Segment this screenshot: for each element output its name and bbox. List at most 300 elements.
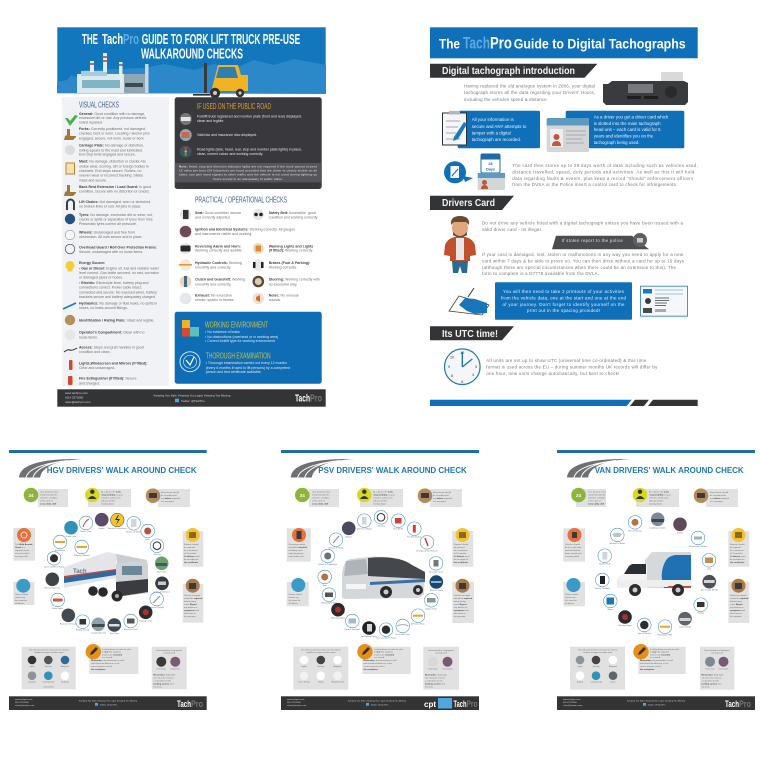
info box: left upper: Check is a xyxy=(15,547,26,549)
check bubbles ring: Coupling & Curtains xyxy=(649,526,666,529)
info box: right lower: Vehicle excepted xyxy=(730,594,747,597)
info box: 24 hour: 24 xyxy=(576,493,581,498)
heading xyxy=(82,32,300,62)
panel: drivers duties xyxy=(86,644,138,674)
panel: daily checks: The walk around check must cover the external xyxy=(301,648,341,652)
working environment bullets: • Correct forklift type for working environment xyxy=(205,339,275,343)
info box: right upper: All defects must xyxy=(184,555,200,558)
panel: equipment: correctly at all xyxy=(163,652,176,655)
icon: driver character xyxy=(444,216,476,273)
panel: drivers duties: Remember: documentation is vital xyxy=(364,659,397,662)
info box: right lower: should be repaired xyxy=(730,598,749,600)
icon: clock: 8 xyxy=(451,374,453,378)
info box: right lower: any defects or xyxy=(184,606,198,609)
practical check text: Noise: No unusual xyxy=(269,294,299,298)
icon: yellow fork lift truck xyxy=(193,63,248,98)
info box: 24 hour: at the start of xyxy=(40,500,53,502)
checks list text: General: Good condition with no damage, xyxy=(79,112,145,116)
icon: road logo xyxy=(567,459,631,478)
info box: report defects: to a manager. xyxy=(433,500,446,503)
info box: 24 hour: at the start of xyxy=(588,500,601,502)
panel: drivers duties: and should be filled out, in the xyxy=(640,662,669,665)
panel: drivers duties: Remember: documentation is vital xyxy=(91,659,124,662)
practical check text: Working correctly. xyxy=(269,265,297,269)
callout: driver card: head unit – each card is valid for 5 xyxy=(594,127,661,132)
check bubbles ring: Doors & Body xyxy=(679,626,691,629)
practical check text: Brakes (Foot & Parking): xyxy=(269,261,310,265)
checks list text: Identification / Rating Plate: Intact and legible. xyxy=(79,318,155,322)
footer bar: Twitter: @TachPro xyxy=(100,704,118,706)
checks list text: • Gas or Diesel: Engine oil, fuel and radiator water xyxy=(79,266,160,270)
info box: right upper: for a minimum xyxy=(184,550,198,552)
public road text xyxy=(197,114,302,156)
panel: drivers duties: in a record. xyxy=(650,657,661,659)
panel: practical operational checks xyxy=(179,196,320,304)
document: guide to digital tachographs xyxy=(430,27,698,406)
info box: right upper: be retained xyxy=(454,546,465,549)
info box: report defects xyxy=(418,488,462,507)
icon: mast clipboard xyxy=(66,163,74,174)
practical check text: Working correctly and audible. xyxy=(195,248,243,252)
text: card stores data: from the DVSA or the Police insert a control card to check for infringements. xyxy=(512,182,677,187)
info box: driver responsibility: As a driver, the main xyxy=(649,490,670,494)
check bubbles ring: Tyres & Wheels xyxy=(638,632,651,635)
check bubbles ring: Warning Lamps xyxy=(139,619,152,622)
checks list text: noted repaired. xyxy=(79,120,103,124)
info box: driver responsibility: vehicle's safety rests xyxy=(649,496,669,500)
info box: driver responsibility: responsibility for your xyxy=(373,494,395,496)
practical check text: smoke, sparks or flames. xyxy=(195,298,234,302)
info box: driver responsibility: with you before xyxy=(649,500,664,502)
footer bar xyxy=(281,696,479,710)
check bubbles ring: Horn xyxy=(323,584,327,587)
panel: equipment xyxy=(700,647,734,690)
panel: equipment: Fuel Leaks xyxy=(157,669,166,671)
footer bar: Pro xyxy=(310,394,322,404)
panel: equipment: braking system and xyxy=(425,683,446,686)
check bubbles ring: Suspension xyxy=(55,550,65,552)
info box: report defects: to a manager. xyxy=(710,500,723,503)
heading: VAN DRIVERS' WALK AROUND CHECK xyxy=(595,465,744,475)
info box: 24 hour: Your general check xyxy=(40,492,59,494)
text: do not drive: Do not drive any vehicle fitted with a digital tachograph unless you have been issued with a xyxy=(482,220,684,226)
info box: left upper xyxy=(287,528,311,562)
panel: daily checks: Doors & Exits xyxy=(298,681,310,684)
heading: working environment: WORKING ENVIRONMENT xyxy=(205,320,268,329)
info box: right lower: take them to xyxy=(730,612,743,615)
check bubbles ring xyxy=(318,510,443,640)
info box: right upper xyxy=(183,528,203,567)
callout: printouts xyxy=(495,282,632,320)
info box: left upper: should be checked xyxy=(288,547,308,549)
check bubbles ring: Brakes Lines xyxy=(81,530,92,533)
text: do not drive xyxy=(482,220,684,232)
info box: right upper: for a minimum xyxy=(730,550,744,552)
checks list text: and charged. xyxy=(79,381,100,385)
icon: 28 days calendar xyxy=(481,154,500,173)
practical check text: Hydraulic Controls: Working xyxy=(195,261,242,265)
panel: drivers duties: In daily duties records are vital xyxy=(374,648,403,651)
check bubbles ring: Horn & Steering xyxy=(628,529,642,532)
icon: tyres xyxy=(65,214,75,224)
checks list text: End stop bolts engaged and secure. xyxy=(79,153,136,157)
check bubbles ring xyxy=(44,513,170,635)
checks list text: Operator's Compartment: Clean with no xyxy=(79,331,145,335)
callout: driver card: tachograph being used. xyxy=(594,140,640,145)
info box: right lower: before being xyxy=(184,601,197,603)
icon: puzzle xyxy=(182,320,199,336)
checks list text: Energy Source: xyxy=(79,261,105,265)
panel: equipment: Instruments xyxy=(170,668,180,671)
check bubbles ring: Wheels & Suspension xyxy=(318,564,337,566)
heading: public road: IF USED ON THE PUBLIC ROAD xyxy=(197,102,271,111)
panel: daily checks xyxy=(22,647,76,689)
thorough examination text: (every 6 months if used to lift persons) by a competent xyxy=(206,366,290,370)
info box: right lower: should be repaired xyxy=(184,598,203,600)
practical check text xyxy=(195,211,320,302)
footer bar: Tach xyxy=(454,699,466,709)
panel: daily checks: The walk around check must cover the external xyxy=(29,648,69,652)
checks list text: Tyres: No damage, excessive dirt or wear; nut, xyxy=(79,213,153,217)
panel: daily checks: condition of engine and other items xyxy=(583,651,612,654)
footer bar: Keeping You Safe, Keeping You Legal, Keeping You Moving xyxy=(348,700,407,702)
info box: right upper: for a minimum xyxy=(454,550,468,552)
check bubbles ring: Tyre Tread & Wheels xyxy=(700,589,718,592)
info box: report defects: be recorded and xyxy=(161,495,177,497)
heading: HGV DRIVERS' WALK AROUND CHECK xyxy=(47,465,197,475)
panel: daily checks: Insulation xyxy=(61,681,69,684)
info box: 24 hour: should include the xyxy=(312,494,330,496)
info box: right upper: be retained xyxy=(184,546,196,549)
info box: left lower: all drivers. xyxy=(15,603,25,605)
info box: driver responsibility xyxy=(85,488,131,507)
info box: right lower: used. Report xyxy=(184,603,197,606)
practical check text: Safety Belt: Accessible, good xyxy=(269,211,316,215)
panel: drivers duties: in any that supports xyxy=(650,651,669,654)
info box: right lower xyxy=(183,579,203,623)
heading: Pro xyxy=(123,32,139,48)
icon: back rest xyxy=(64,185,76,196)
panel: drivers duties: checks are recorded xyxy=(374,654,395,656)
footer bar: 0114 2572060 xyxy=(15,702,30,704)
checks list text: Access: Steps and grab handles in good xyxy=(79,345,144,349)
panel: daily checks: and roll bars xyxy=(43,686,54,689)
icon: clock: 10 xyxy=(450,356,454,360)
public road text: Road lights (side, head, rear, stop and number plate lights) in place, xyxy=(197,147,302,151)
panel: equipment: are not to be used as xyxy=(154,677,174,680)
checks list text: loose items. xyxy=(79,335,98,339)
info box: right upper: Reports should xyxy=(454,543,469,546)
checks list text: engaged, secure, not worn, loose or bent. xyxy=(79,136,144,140)
info box: right lower: take them to xyxy=(454,612,466,615)
info box: 24 hour: at the start of xyxy=(312,500,325,502)
heading: GUIDE TO FORK LIFT TRUCK PRE-USE xyxy=(142,32,300,48)
check bubbles ring: Battery xyxy=(698,612,704,615)
info box: report defects: to a manager. xyxy=(161,500,174,503)
check bubbles ring: Glass View xyxy=(157,572,167,574)
panel: drivers duties: checks are recorded xyxy=(102,654,123,656)
check bubbles ring: Washer Fluid xyxy=(599,563,610,566)
checks list text: excessive dirt or rust. Any previous defects xyxy=(79,116,146,120)
info box: report defects xyxy=(146,488,190,507)
checks list text: connections correct. Power cable intact, xyxy=(79,286,142,290)
panel: daily checks: Security xyxy=(317,665,324,668)
info box: driver responsibility: responsibility for your xyxy=(649,494,671,496)
panel: drivers duties: and should be filled out, in the xyxy=(91,662,120,665)
panel: daily checks: Wheelchair Lift xyxy=(331,681,344,684)
info box: left lower: Unless stated xyxy=(15,593,29,596)
info box: right upper xyxy=(728,528,749,567)
document: fork lift truck walkaround checks xyxy=(57,27,326,407)
info box: report defects: Each check should xyxy=(433,492,452,494)
info box: report defects: any defect reported xyxy=(433,497,453,500)
panel: equipment: Fuel Leaks xyxy=(428,669,438,671)
text: damaged card xyxy=(482,252,685,276)
top rule xyxy=(281,450,479,453)
info box: driver responsibility: As a driver, the main xyxy=(373,490,394,494)
panel: equipment: Remember: daily walk xyxy=(702,675,724,677)
info box: report defects xyxy=(694,488,738,507)
checks list text: connected and secure. No exposed wires, battery xyxy=(79,290,157,294)
panel: daily checks: Bodywork xyxy=(61,665,69,668)
check bubbles ring: Fuel Leaks Caps xyxy=(396,634,410,636)
info box: 24 hour: 24 xyxy=(300,493,305,498)
practical check text: and instruments visible and working. xyxy=(195,232,252,236)
info box: right lower: used. Report xyxy=(454,603,467,606)
thorough examination text xyxy=(206,361,290,374)
info box: right lower: any defects or xyxy=(730,606,744,609)
icon: clock: 12 xyxy=(460,351,464,355)
panel: drivers duties: in any that supports xyxy=(374,651,393,654)
practical check text: sounds. xyxy=(269,298,281,302)
checks list text: Carriage Plate: No damage or distortion, xyxy=(79,144,144,148)
footer bar: Twitter: @TachPro xyxy=(370,704,389,706)
practical check text: Ignition and Electrical Systems: Working correctly. All gauges xyxy=(195,228,295,232)
icon: certificate seal xyxy=(180,352,200,372)
check bubbles ring: Wheel Suspension xyxy=(44,587,60,589)
info box: left upper xyxy=(563,528,585,562)
note strip: 15 miles per hour (24 kilometres per hour) provided that the driver is clearly visible on all xyxy=(179,168,317,172)
panel: drivers duties: Remember: documentation is vital xyxy=(640,659,673,662)
heading: visual checks: VISUAL CHECKS xyxy=(79,100,119,110)
check bubbles ring: Brakes xyxy=(99,527,105,530)
footer bar: Tach xyxy=(177,699,191,709)
info box: left upper: Vehicles should xyxy=(565,544,581,546)
panel: equipment: Remember: daily walk xyxy=(154,675,176,677)
footer bar: cpt xyxy=(424,700,436,709)
public road text: Valid tax and insurance disc displayed. xyxy=(197,133,257,137)
panel: equipment: Instruments xyxy=(443,668,452,671)
info box: right upper: All defects must xyxy=(730,555,746,558)
section heading: utc time: Its UTC time! xyxy=(442,329,498,340)
info box: left lower xyxy=(287,578,309,606)
info box: right upper: All defects must xyxy=(454,555,470,558)
check bubbles ring xyxy=(595,512,718,637)
info box: driver responsibility xyxy=(633,488,679,507)
check bubbles ring: Windows & Mirrors xyxy=(609,542,625,545)
text: utc explanation: format is used across the EU – during summer months UK records will differ by xyxy=(486,364,658,370)
panel: working environment and thorough examination xyxy=(175,312,322,384)
practical check text: Reversing Alarm and Horn: xyxy=(195,244,241,248)
check bubbles ring: Reflectors Plates xyxy=(411,623,425,626)
icon: lights xyxy=(69,360,72,370)
check bubbles ring: Steering xyxy=(153,553,161,556)
checks list text: intact and secure. xyxy=(79,178,107,182)
check bubbles ring: Wipers xyxy=(607,608,613,611)
check bubbles ring: Fire Extinguisher xyxy=(407,536,422,539)
section heading: introduction: Digital tachograph introduction xyxy=(442,66,575,77)
checks list text: cracked, bent or worn. Locating / anchor pins xyxy=(79,132,150,136)
panel: daily checks: Security xyxy=(593,665,599,668)
check bubbles ring: Fuel Caps xyxy=(110,633,119,635)
info box: right lower: Vehicle excepted xyxy=(454,594,471,597)
info box: right upper xyxy=(452,528,473,567)
check bubbles ring: Coupling Security xyxy=(91,631,106,634)
info box: left upper: exits before use. xyxy=(288,555,305,558)
top rule xyxy=(9,450,207,453)
footer bar xyxy=(9,696,207,710)
panel: daily checks: The walk around check must cover the external xyxy=(578,648,618,652)
checks list text: condition, secure with no distortion or cracks. xyxy=(79,190,150,194)
panel: daily checks: Security xyxy=(45,665,52,668)
panel: visual checks xyxy=(62,97,169,386)
icon: lift chains xyxy=(66,199,75,210)
info box: left lower xyxy=(13,579,34,605)
panel: drivers duties xyxy=(633,644,686,674)
footer bar: Keeping You Safe, Keeping You Legal, Keeping You Moving xyxy=(79,700,138,702)
text: damaged card: card within 7 days & be able to prove so. You can then drive without a card for up to 15 days xyxy=(482,258,685,264)
info box: 24 hour xyxy=(295,488,339,507)
checks list text xyxy=(79,112,160,385)
heading: thorough examination: THOROUGH EXAMINATION xyxy=(206,352,271,361)
section heading: drivers card xyxy=(430,196,514,210)
callout: information secure: tachograph are recorded. xyxy=(472,137,521,142)
intro text: Having replaced the old analogue system in 2006, your digital xyxy=(464,84,595,88)
text: card stores data xyxy=(512,163,698,187)
section heading: drivers card: Drivers Card xyxy=(442,198,495,209)
icon: tachograph unit xyxy=(603,72,688,105)
check bubbles ring: Lights & Indicators xyxy=(345,628,360,631)
panel: daily checks: Lights xyxy=(29,665,35,668)
panel: daily checks: Lights xyxy=(577,665,583,668)
icon: number plate xyxy=(180,113,192,125)
working environment bullets: • No obstructions (overhead or in working area) xyxy=(205,335,278,339)
info box: right upper: of 15 months. xyxy=(730,552,743,555)
working environment bullets xyxy=(205,330,278,343)
practical check text: no excessive play. xyxy=(269,282,297,286)
practical check icons xyxy=(179,209,264,304)
header banner: The xyxy=(439,36,460,51)
footer bar: 0114 2572060 xyxy=(287,702,302,704)
info box: left upper xyxy=(13,528,35,561)
checks list text: obstruction. All nuts secure and in place. xyxy=(79,235,143,239)
checks list text: Lift Chains: Not damaged, worn or stretched, xyxy=(79,200,151,204)
info box: driver responsibility: responsibility for your xyxy=(101,494,123,496)
practical check text: (if fitted): Working correctly. xyxy=(269,248,313,252)
icon: id card xyxy=(640,286,688,316)
info box: right lower: Vehicle excepted xyxy=(184,594,201,597)
panel: drivers duties xyxy=(357,644,411,674)
check bubbles ring: Horn xyxy=(146,538,150,541)
footer bar: sales@tachpro.com xyxy=(287,704,307,707)
checks list text: Lights,Windscreen and Mirrors (If fitted): xyxy=(79,361,148,365)
panel: equipment: correctly at all xyxy=(711,652,723,655)
illustration: hgv truck xyxy=(64,552,148,602)
check bubbles ring: Registration Plate xyxy=(658,634,672,637)
check bubbles ring: Exhaust & Engine xyxy=(149,606,164,609)
practical check text: smoothly and correctly. xyxy=(195,265,231,269)
panel: equipment: are not to be used as xyxy=(702,677,722,680)
callout: information secure: tamper with a digital xyxy=(472,130,511,136)
panel: daily checks: Bodywork xyxy=(609,665,617,668)
info box: driver responsibility: As a driver, the main xyxy=(101,490,122,494)
practical check text: and correctly adjusted. xyxy=(195,215,231,219)
section heading: introduction xyxy=(430,64,598,78)
panel: equipment: Remember: daily walk xyxy=(425,675,448,677)
panel: equipment: the tests. xyxy=(425,686,434,689)
info box: 24 hour xyxy=(571,488,607,507)
header banner: Guide to Digital Tachographs xyxy=(514,36,686,51)
info box: left upper: secured safely. xyxy=(565,556,580,558)
footer bar: 0114 2572060 xyxy=(563,702,578,704)
practical check text: Exhaust: No excessive xyxy=(195,294,232,298)
callout: driver card xyxy=(547,111,684,152)
info box: right lower: used. Report xyxy=(730,603,743,606)
info box: left lower xyxy=(563,578,585,606)
panel: drivers duties: the workplace. xyxy=(364,668,379,671)
checks list text: condition and clean. xyxy=(79,350,111,354)
check bubbles ring: Registration Plates xyxy=(321,602,337,605)
thorough examination text: • Thorough examination carried out every 12 months xyxy=(206,361,287,365)
footer bar: Tach xyxy=(725,699,739,709)
document: van drivers walk around check xyxy=(557,450,755,710)
callout: driver card: is slotted into the main tachograph xyxy=(594,121,661,126)
check bubbles ring: Passenger Seats xyxy=(429,570,443,573)
panel: drivers duties: correct manner and at xyxy=(91,665,112,668)
panel: daily checks: Bodywork xyxy=(333,665,342,668)
info box: left upper: of each vehicle xyxy=(15,553,30,555)
info box: right lower: the operator. xyxy=(730,615,742,618)
check bubbles ring: Tyres and Wheel Fixing xyxy=(44,565,64,568)
footer bar: www.tachpro.com xyxy=(65,391,88,395)
icon: small driver card xyxy=(478,173,505,190)
panel: equipment: a substitute for the xyxy=(425,680,443,683)
check bubbles ring: Brake Lights xyxy=(52,607,63,610)
checks list text: hoses, no leaks around fittings. xyxy=(79,306,128,310)
text: card stores data: distance travelled, speed, duty periods and activities. As well as this it will hold xyxy=(512,170,695,174)
panel: daily checks: Load Security xyxy=(590,681,602,684)
public road text: clean and legible. xyxy=(197,119,224,123)
check bubbles ring: Tyres and Wheel Fixing xyxy=(376,637,396,640)
check bubbles ring: Washers & Wipers xyxy=(357,528,372,531)
callout: information secure: secure and ANY attempts to xyxy=(472,124,527,129)
info box: right upper: be recorded on xyxy=(454,559,469,561)
public road text: clean, correct colour and working correctly. xyxy=(197,152,263,156)
check bubbles ring: Exhaust & Smoke xyxy=(328,547,344,550)
panel: drivers duties: correct manner and at xyxy=(364,665,385,668)
check bubbles ring: Mirrors & Glass xyxy=(430,589,443,592)
info box: right lower: symptoms and xyxy=(184,609,200,612)
heading: PSV DRIVERS' WALK AROUND CHECK xyxy=(318,465,467,475)
callout: driver card: years and identifies you on the xyxy=(594,134,654,138)
icon: green check xyxy=(65,115,78,126)
icon: clock: 4 xyxy=(472,373,474,377)
info box: right lower: before being xyxy=(454,601,467,603)
public road text: Forklift truck registered and number plate (front and rear) displayed, xyxy=(197,114,302,118)
check bubbles ring: Excessive Oil Leaks xyxy=(60,623,77,625)
checks list text: rolling square to the mast and lubricated. xyxy=(79,148,143,152)
icon: data clipboard bubble xyxy=(444,161,473,183)
